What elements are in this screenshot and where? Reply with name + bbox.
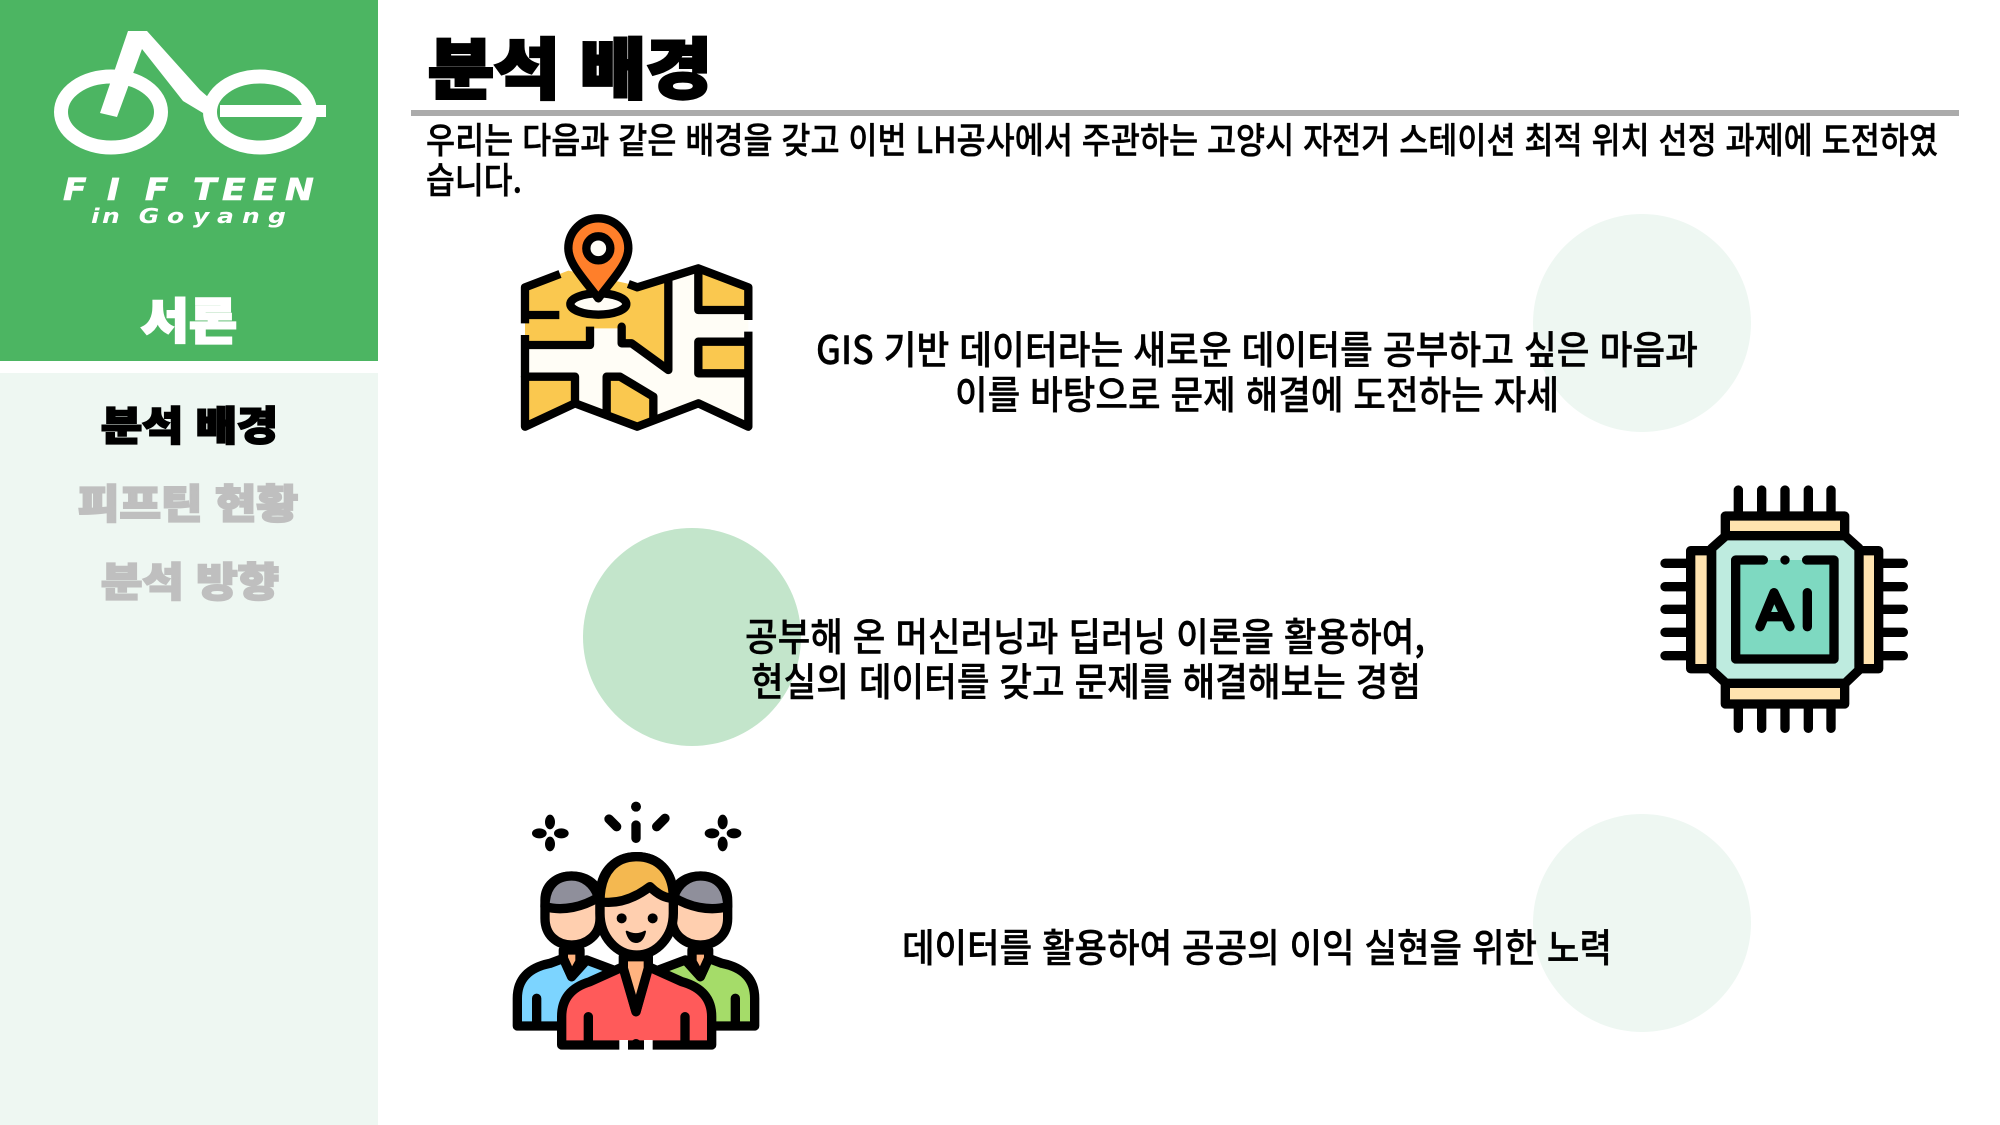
text block 2: 현실의 데이터를 갖고 문제를 해결해보는 경험 <box>751 652 1421 708</box>
logo subtitle: in Goyang <box>91 205 286 228</box>
sidebar navigation panel <box>0 373 378 1125</box>
text block 3: 데이터를 활용하여 공공의 이익 실현을 위한 노력 <box>902 918 1612 974</box>
decorative circle 3 <box>1533 814 1751 1032</box>
text block 2: 공부해 온 머신러닝과 딥러닝 이론을 활용하여, <box>745 607 1425 663</box>
logo wordmark: FIFTEEN <box>63 172 314 207</box>
text block 2 <box>745 607 1425 708</box>
nav item: 분석 방향 <box>101 550 279 608</box>
logo: bicycle <box>61 31 326 148</box>
page title: 분석 배경 <box>428 17 712 113</box>
text block 1 <box>816 320 1698 421</box>
nav item active: 분석 배경 <box>101 394 278 452</box>
icon: AI chip <box>1660 485 1908 733</box>
text block 1: GIS 기반 데이터라는 새로운 데이터를 공부하고 싶은 마음과 <box>816 320 1698 376</box>
decorative circle 2 <box>583 528 801 746</box>
sidebar header panel <box>0 0 378 361</box>
decorative circle 1 <box>1533 214 1751 432</box>
icon: map with pin <box>520 214 752 431</box>
icon: team of people <box>512 802 760 1050</box>
section name: 서론 <box>141 282 237 352</box>
nav item: 피프틴 현황 <box>78 472 298 530</box>
title rule <box>411 110 1959 116</box>
intro text <box>426 112 1938 204</box>
intro text: 습니다. <box>426 152 522 204</box>
text block 1: 이를 바탕으로 문제 해결에 도전하는 자세 <box>955 365 1559 421</box>
